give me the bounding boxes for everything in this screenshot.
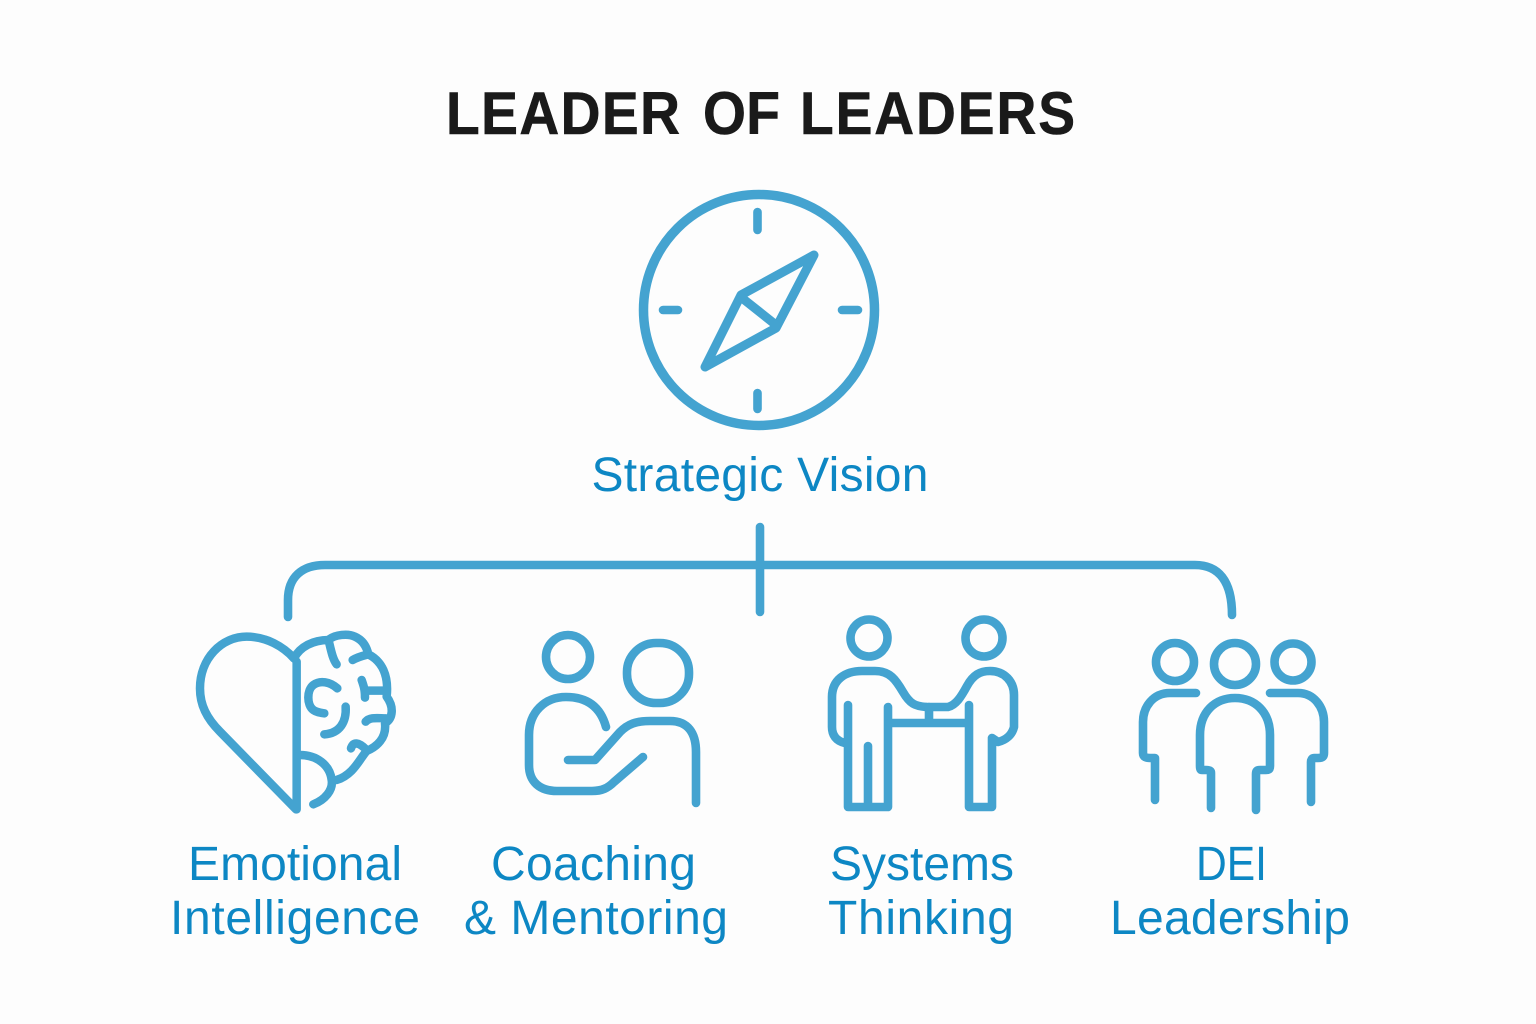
title	[446, 81, 1075, 148]
label: emotional intelligence: Intelligence	[170, 892, 420, 945]
label: emotional intelligence: Emotional	[188, 838, 402, 891]
label: coaching and mentoring: Coaching	[491, 838, 696, 891]
label: strategic vision: Strategic Vision	[592, 449, 928, 502]
label: DEI leadership: Leadership	[1110, 892, 1350, 945]
label: systems thinking: Systems	[830, 838, 1014, 891]
icon: coaching and mentoring	[529, 635, 696, 803]
icon: DEI group of people	[1143, 643, 1324, 810]
icon: compass	[644, 194, 874, 426]
label: coaching and mentoring: & Mentoring	[464, 892, 728, 945]
label: coaching and mentoring	[464, 838, 728, 945]
connector: hierarchy bracket	[288, 527, 1232, 617]
label: emotional intelligence	[170, 838, 420, 945]
label: DEI leadership: DEI	[1196, 838, 1267, 891]
label: systems thinking	[828, 838, 1014, 945]
icon: systems thinking handshake	[832, 620, 1014, 807]
title: LEADERS	[800, 81, 1075, 148]
label: DEI leadership	[1110, 838, 1350, 945]
title: OF	[703, 81, 780, 148]
title: LEADER	[446, 81, 680, 148]
label: systems thinking: Thinking	[828, 892, 1014, 945]
icon: heart and brain	[200, 635, 392, 809]
